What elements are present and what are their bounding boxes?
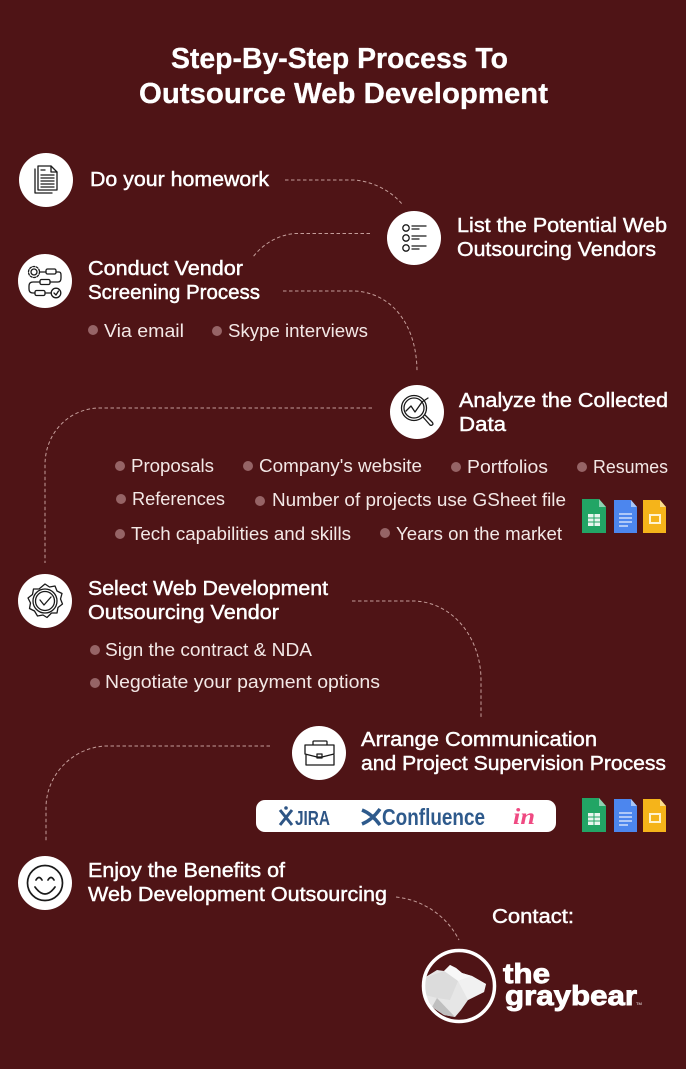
heading	[459, 390, 668, 436]
list: data sources: Company's website	[259, 456, 422, 476]
list: screening methods	[88, 321, 368, 341]
icon: briefcase	[292, 726, 346, 780]
step: analyze collected data	[115, 385, 668, 544]
list: data sources: Tech capabilities and skills	[131, 524, 351, 544]
heading	[457, 215, 667, 261]
logo: jira	[280, 806, 330, 830]
logo: jira: JIRA	[295, 808, 330, 830]
wordmark: graybear	[505, 980, 637, 1011]
connector: benefits to logo	[396, 897, 459, 940]
icon: process flow	[18, 254, 72, 308]
heading: Arrange Communication	[361, 729, 597, 751]
heading: List the Potential Web	[457, 215, 667, 237]
heading: Data	[459, 414, 507, 436]
logo: invision: in	[513, 804, 535, 829]
wordmark: the	[503, 958, 550, 989]
list: contract items: Sign the contract & NDA	[105, 640, 312, 660]
connector: homework to vendors list	[285, 180, 402, 204]
heading: Screening Process	[88, 282, 260, 304]
step: do your homework	[19, 153, 270, 207]
list: data sources: Resumes	[593, 457, 668, 477]
list: data sources: Proposals	[131, 456, 214, 476]
list: contract items	[90, 640, 380, 692]
heading	[88, 860, 387, 906]
connector: analyze to select vendor	[45, 408, 372, 563]
panel: tool logos	[256, 800, 556, 832]
list: data sources	[115, 456, 668, 544]
logo: the graybear	[424, 950, 642, 1022]
list: data sources: Number of projects use GSheet file	[272, 490, 566, 510]
heading: Conduct Vendor	[88, 258, 243, 280]
wordmark: TM	[636, 1001, 642, 1006]
icons: google sheets, docs, slides	[582, 798, 666, 832]
list: data sources: Years on the market	[396, 524, 562, 544]
heading: Enjoy the Benefits of	[88, 860, 285, 882]
icon: smiley	[18, 856, 72, 910]
connector: arrange communication to benefits	[46, 746, 270, 842]
step: enjoy the benefits	[18, 856, 387, 910]
title	[139, 43, 548, 110]
step: arrange communication	[256, 726, 666, 832]
heading	[88, 578, 328, 624]
connector: vendors list to screening	[253, 234, 370, 257]
heading: Outsourcing Vendor	[88, 602, 279, 624]
logo: confluence: Confluence	[382, 804, 485, 830]
list: screening methods: Via email	[104, 321, 184, 341]
heading: Analyze the Collected	[459, 390, 668, 412]
heading: and Project Supervision Process	[361, 753, 666, 775]
step: conduct vendor screening	[18, 254, 368, 341]
icons: google sheets, docs, slides	[582, 499, 666, 533]
heading: Select Web Development	[88, 578, 328, 600]
title: Step-By-Step Process To	[171, 43, 508, 75]
heading	[88, 258, 260, 304]
icon: badge with check	[18, 574, 72, 628]
heading: Do your homework	[90, 169, 270, 191]
list: data sources: References	[132, 489, 225, 509]
heading	[361, 729, 666, 775]
connector: screening to analyze	[283, 291, 417, 372]
list: data sources: Portfolios	[467, 457, 548, 477]
connector: select vendor to arrange communication	[352, 601, 481, 718]
step: list the potential vendors	[387, 211, 667, 265]
list: contract items: Negotiate your payment options	[105, 672, 380, 692]
heading: Outsourcing Vendors	[457, 239, 656, 261]
wordmark	[503, 958, 642, 1011]
title: Outsource Web Development	[139, 78, 548, 110]
step: select vendor	[18, 574, 380, 692]
list: screening methods: Skype interviews	[228, 321, 368, 341]
icon: checklist	[387, 211, 441, 265]
heading: Web Development Outsourcing	[88, 884, 387, 906]
icon: magnifier with chart	[390, 385, 444, 439]
contact label: Contact:	[492, 906, 574, 928]
icon: documents	[19, 153, 73, 207]
icon: bear in ring	[424, 950, 494, 1022]
